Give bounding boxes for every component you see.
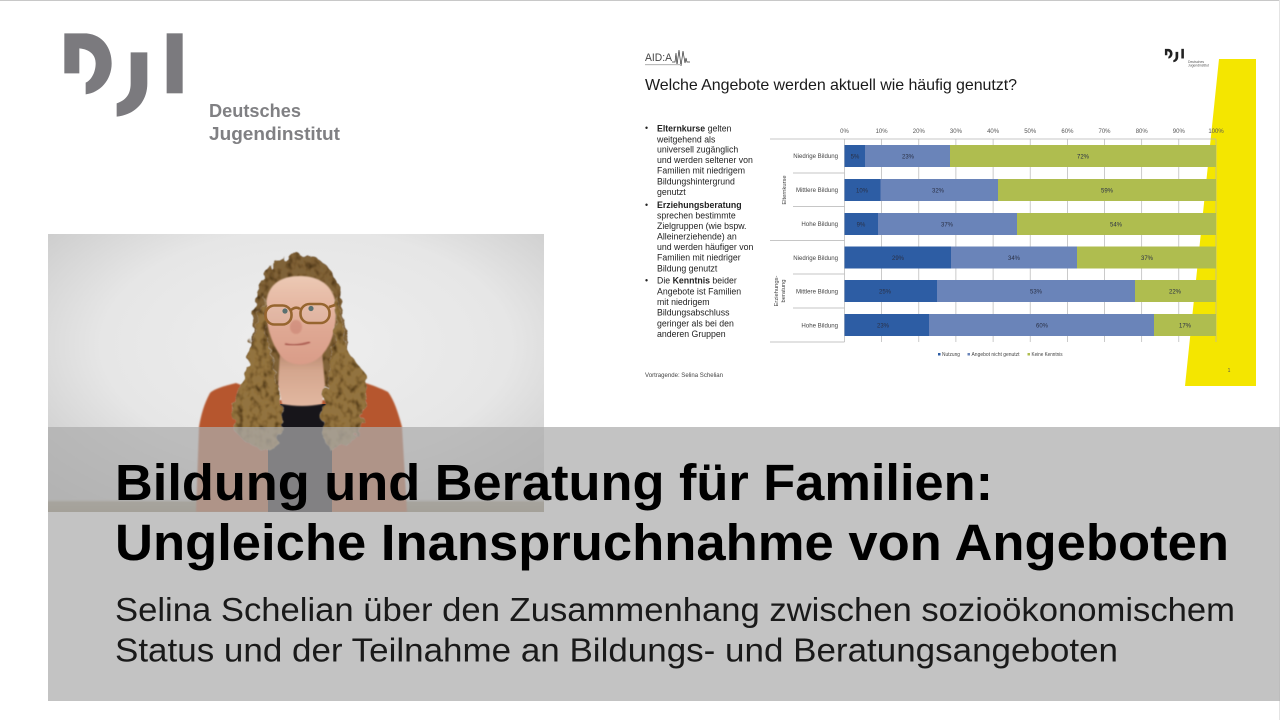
text block: slide bullets: und werden seltener von (657, 155, 753, 165)
row labels: Niedrige Bildung (793, 153, 838, 160)
glasses (266, 304, 335, 324)
subtitle (115, 591, 1235, 668)
text block: slide bullets: anderen Gruppen (657, 329, 726, 339)
black top (268, 404, 332, 512)
axis percentage labels: 60% (1061, 129, 1074, 135)
axis percentage labels: 0% (840, 129, 850, 135)
bar row 2: 10% (856, 188, 869, 194)
chart legend (938, 352, 1063, 358)
text block: slide bullets (645, 123, 753, 339)
bar row 1: 23% (902, 154, 915, 160)
bar row 1 (844, 145, 1216, 167)
text block: slide bullets: Familien mit niedriger (657, 252, 741, 262)
text block: slide bullets: • (645, 276, 648, 286)
chart grid lines and axis (770, 139, 1216, 342)
row labels: Hohe Bildung (801, 322, 838, 330)
bar row 5: 25% (879, 290, 892, 296)
logo: small DJI (1165, 49, 1209, 68)
text block: slide bullets: Erziehungsberatung (657, 200, 742, 210)
bar row 2 (844, 179, 1216, 201)
text block: slide bullets: und werden häufiger von (657, 242, 753, 252)
text: logo wordmark (209, 100, 340, 144)
chart: stacked bars of offer usage (770, 129, 1224, 358)
axis percentage labels: 100% (1208, 129, 1224, 135)
chart legend: Keine Kenntnis (1032, 352, 1063, 358)
bar row 1: 5% (851, 154, 860, 160)
panel: title band (48, 427, 1280, 701)
logo: small DJI: Jugendinstitut (1188, 64, 1209, 68)
text block: slide bullets: Angebote ist Familien (657, 287, 741, 297)
axis percentage labels: 20% (913, 129, 925, 135)
title: Bildung und Beratung für Familien: (115, 454, 993, 511)
icon: DJI letterforms (64, 33, 183, 117)
photo: speaker portrait (48, 234, 544, 512)
text: logo wordmark: Jugendinstitut (209, 123, 340, 144)
logo: DJI Deutsches Jugendinstitut (64, 33, 340, 144)
bar row 6: 23% (877, 324, 890, 330)
group label: Erziehungsberatung: Erziehungs- (774, 275, 780, 306)
logo: small DJI: Deutsches (1188, 60, 1204, 64)
text block: slide bullets: Elternkurse gelten (657, 124, 732, 134)
bar row 2: 32% (932, 188, 945, 194)
bar row 5 (844, 280, 1216, 302)
bar row 3: 54% (1110, 222, 1123, 228)
text block: slide bullets: • (645, 200, 648, 210)
text block: slide bullets: mit niedrigem (657, 297, 710, 307)
slide number: 1 (1228, 368, 1231, 374)
slide footer: speaker: Vortragende: Selina Schelian (645, 373, 723, 379)
group label: Elternkurse: Elternkurse (782, 175, 788, 205)
hair right side (321, 294, 369, 450)
axis percentage labels: 70% (1098, 129, 1111, 135)
bar row 4: 34% (1008, 256, 1021, 262)
bar row 4 (844, 246, 1216, 268)
text block: slide bullets: sprechen bestimmte (657, 210, 736, 220)
bar row 6: 17% (1179, 324, 1192, 330)
text block: slide bullets: • (645, 123, 648, 133)
logo: AID:A: AID:A (645, 52, 673, 64)
axis percentage labels: 90% (1173, 129, 1185, 135)
hair left side (233, 296, 283, 450)
bar row 3: 37% (941, 222, 954, 228)
text block: slide bullets: Familien mit niedrigem (657, 166, 745, 176)
text block: slide bullets: Bildungshintergrund (657, 176, 735, 186)
nose (290, 320, 302, 334)
text block: slide bullets: Bildungsabschluss (657, 308, 730, 318)
bar row 6 (844, 314, 1216, 336)
chart legend: Nutzung (942, 352, 960, 358)
eyes (282, 306, 314, 314)
text: logo wordmark: Deutsches (209, 100, 301, 121)
axis percentage labels: 40% (987, 129, 1000, 135)
text block: slide bullets: universell zugänglich (657, 145, 738, 155)
row labels: Niedrige Bildung (793, 255, 838, 262)
bar row 2: 59% (1101, 188, 1114, 194)
text block: slide bullets: Alleinerziehende) an (657, 231, 737, 241)
bar row 3: 9% (857, 222, 866, 228)
title: Ungleiche Inanspruchnahme von Angeboten (115, 514, 1229, 571)
text block: slide bullets: weitgehend als (656, 134, 716, 144)
text block: slide bullets: genutzt (657, 187, 686, 197)
row labels: Mittlere Bildung (796, 187, 838, 194)
group label: Erziehungsberatung: beratung (781, 280, 787, 302)
text block: slide bullets: Zielgruppen (wie bspw. (657, 221, 746, 231)
row labels: Mittlere Bildung (796, 288, 838, 296)
bar row 4: 29% (892, 256, 905, 262)
face (266, 276, 336, 364)
text block: slide bullets: Die Kenntnis beider (657, 276, 737, 286)
neck and chest (278, 352, 325, 406)
axis percentage labels: 30% (950, 129, 963, 135)
row labels: Hohe Bildung (801, 221, 838, 228)
text block: slide bullets: geringer als bei den (657, 318, 734, 328)
subtitle: Status und der Teilnahme an Bildungs- und Beratungsangeboten (115, 632, 1118, 668)
jacket (196, 382, 407, 512)
decorative yellow shape (1185, 59, 1256, 386)
row labels (793, 153, 838, 330)
bar row 1: 72% (1077, 154, 1090, 160)
logo: AID:A (645, 50, 690, 66)
bar row 4: 37% (1141, 256, 1154, 262)
panel: slide thumbnail (645, 49, 1256, 386)
text block: slide bullets: Bildung genutzt (657, 264, 718, 274)
chart legend: Angebot nicht genutzt (972, 352, 1020, 358)
bar row 3 (844, 213, 1216, 235)
axis percentage labels: 80% (1136, 129, 1148, 135)
bar row 5: 53% (1030, 290, 1043, 296)
bar row 6: 60% (1036, 324, 1049, 330)
hair back (250, 254, 350, 392)
title (115, 454, 1229, 571)
slide heading: Welche Angebote werden aktuell wie häufig genutzt? (645, 77, 1017, 94)
axis percentage labels: 10% (876, 129, 888, 135)
subtitle: Selina Schelian über den Zusammenhang zwischen sozioökonomischem (115, 591, 1235, 628)
mouth (285, 342, 310, 345)
bar row 5: 22% (1169, 290, 1182, 296)
axis percentage labels: 50% (1024, 129, 1037, 135)
axis percentage labels (840, 129, 1224, 135)
